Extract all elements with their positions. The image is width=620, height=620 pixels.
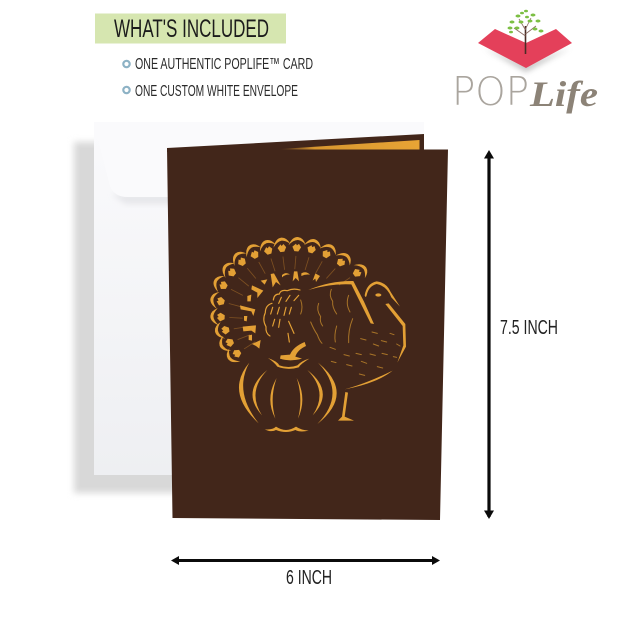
item two: ONE CUSTOM WHITE ENVELOPE <box>135 83 298 100</box>
bullet one <box>123 61 130 67</box>
heading: what's included: WHAT'S INCLUDED <box>114 15 269 43</box>
logo red book chevron <box>478 29 572 68</box>
flap shadow <box>112 194 424 204</box>
heading: what's included <box>95 14 286 44</box>
card front panel <box>167 148 448 520</box>
height dimension arrow <box>484 150 494 519</box>
envelope <box>74 122 424 493</box>
tail fan feathers <box>208 236 371 366</box>
pumpkin <box>239 342 337 432</box>
logo: PopLife <box>452 10 598 115</box>
body feather marks <box>301 289 400 375</box>
height label: 7.5 INCH <box>500 317 558 339</box>
width label: 6 INCH <box>286 567 332 589</box>
envelope body <box>94 123 424 475</box>
logo chevron shadow <box>484 48 570 72</box>
envelope flap <box>94 122 424 197</box>
body outline <box>308 281 406 421</box>
logo tree <box>508 10 544 54</box>
logo word Life: Life <box>529 74 598 114</box>
envelope shadow <box>74 142 184 493</box>
width dimension arrow <box>171 556 440 565</box>
list of included items <box>123 56 313 100</box>
greeting card <box>167 134 448 520</box>
breast scallops <box>264 289 300 342</box>
card inner orange page <box>280 140 420 150</box>
card back panel <box>167 134 424 152</box>
item one: ONE AUTHENTIC POPLIFE™ CARD <box>135 56 313 73</box>
logo word POP: POP <box>452 70 529 115</box>
turkey and pumpkin papercut <box>208 236 406 432</box>
bullet two <box>123 87 130 93</box>
inner fan marks <box>240 271 320 349</box>
